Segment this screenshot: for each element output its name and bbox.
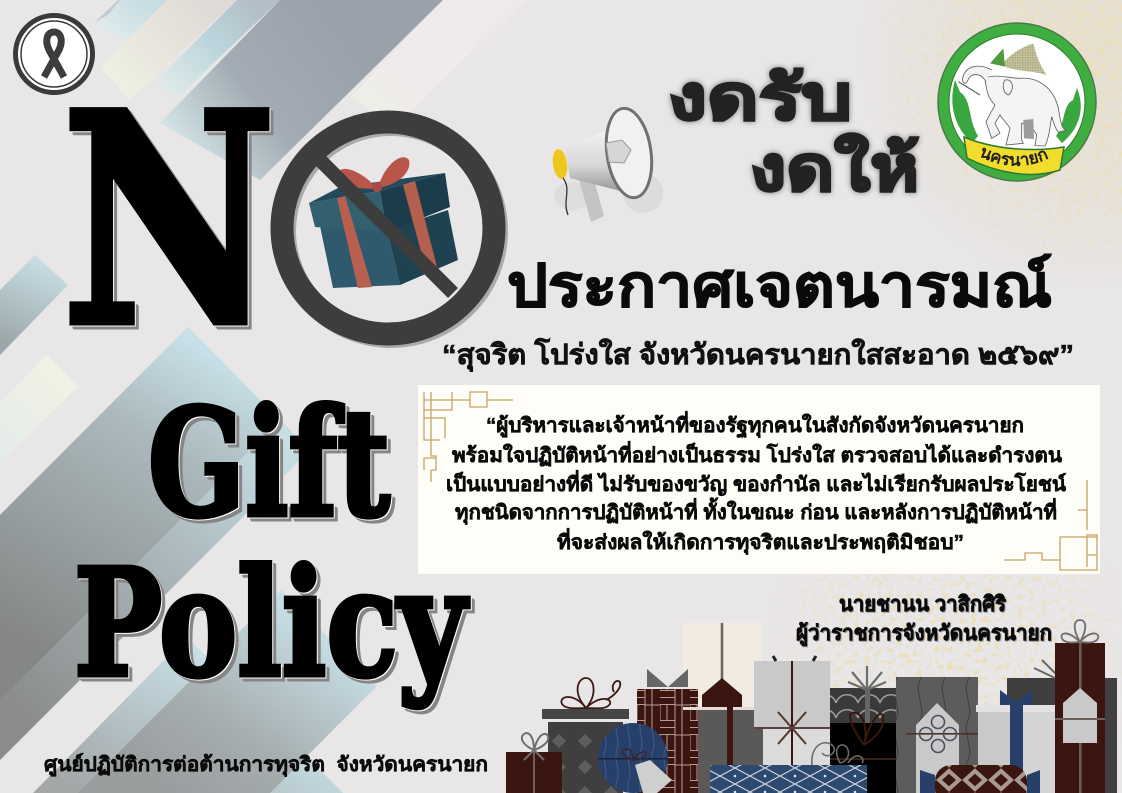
gift: black: [830, 713, 907, 793]
gift: small brown: [506, 733, 562, 793]
icon: mourning ribbon badge: [16, 16, 92, 92]
gift: light gray with star: [754, 656, 830, 765]
title: Policy: Policy: [74, 536, 469, 710]
logo: Nakhon Nayok emblem: [937, 22, 1097, 182]
pledge text: พร้อมใจปฏิบัติหน้าที่อย่างเป็นธรรม โปร่งใส ตรวจสอบได้และดำรงตน: [452, 440, 1062, 467]
gift: light gray with blue ribbon: [976, 690, 1058, 793]
pledge text: เป็นแบบอย่างที่ดี ไม่รับของขวัญ ของกำนัล และไม่เรียกรับผลประโยชน์: [446, 469, 1066, 496]
pledge text: “ผู้บริหารและเจ้าหน้าที่ของรัฐทุกคนในสังกัดจังหวัดนครนายก: [486, 410, 1024, 439]
gift: charcoal with lid: [542, 678, 629, 793]
pledge text: ทุกชนิดจากการปฏิบัติหน้าที่ ทั้งในขณะ ก่อน และหลังการปฏิบัติหน้าที่: [455, 497, 1057, 525]
heading: งดรับ งดให้: [668, 64, 919, 204]
signature: governor: ผู้ว่าราชการจังหวัดนครนายก: [796, 621, 1052, 647]
diagonal bands: top: [95, 0, 525, 180]
heading: งดรับ งดให้: งดรับ: [668, 64, 852, 133]
gift: blue diamond: [710, 743, 867, 793]
diagonal bands: lower left: [0, 255, 377, 793]
pledge text: ที่จะส่งผลให้เกิดการทุจริตและประพฤติมิชอบ”: [557, 527, 964, 555]
elephant: [958, 43, 1067, 146]
gift: tall brown: [1055, 620, 1105, 793]
pledge text: [446, 410, 1066, 555]
heading: ประกาศเจตนารมณ์: ประกาศเจตนารมณ์: [507, 253, 1052, 319]
gift: gray with house bow: [683, 678, 763, 793]
illustration: gift boxes: [506, 620, 1117, 793]
title: Gift: Gift: [148, 376, 390, 550]
panel: pledge statement: [418, 385, 1100, 574]
gift: scallop: [830, 666, 897, 724]
gift: brown brick: [637, 669, 698, 793]
ornament: bottom right: [1004, 480, 1097, 570]
banner with province name: นครนายก: [980, 148, 1048, 166]
heading: งดรับ งดให้: งดให้: [750, 133, 919, 204]
icon: gift box: [309, 157, 458, 288]
title: N: N: [62, 51, 276, 391]
prohibition sign with gift: [282, 122, 497, 337]
gift: candy: [920, 765, 1040, 793]
signature: governor: [796, 593, 1052, 647]
gift: cream tall: [683, 623, 762, 713]
signature: governor: นายชานน วาสิกศิริ: [839, 593, 1007, 616]
icon: megaphone: [551, 105, 663, 222]
banner with province name: [963, 136, 1065, 176]
icon: prohibition ring and slash: [282, 122, 497, 337]
leaves: [952, 80, 1081, 143]
ornament: top left: [424, 392, 513, 482]
gift: dark back right: [1007, 660, 1117, 793]
background: [780, 0, 1122, 705]
gift: blue round with tag: [598, 723, 672, 793]
gift: gray wave with flower tag: [896, 677, 978, 793]
subtitle: “สุจริต โปร่งใส จังหวัดนครนายกใสสะอาด ๒๕๖๙”: [442, 337, 1074, 372]
footer: anti-corruption centre: ศูนย์ปฏิบัติการต่อต้านการทุจริต จังหวัดนครนายก: [44, 753, 488, 778]
